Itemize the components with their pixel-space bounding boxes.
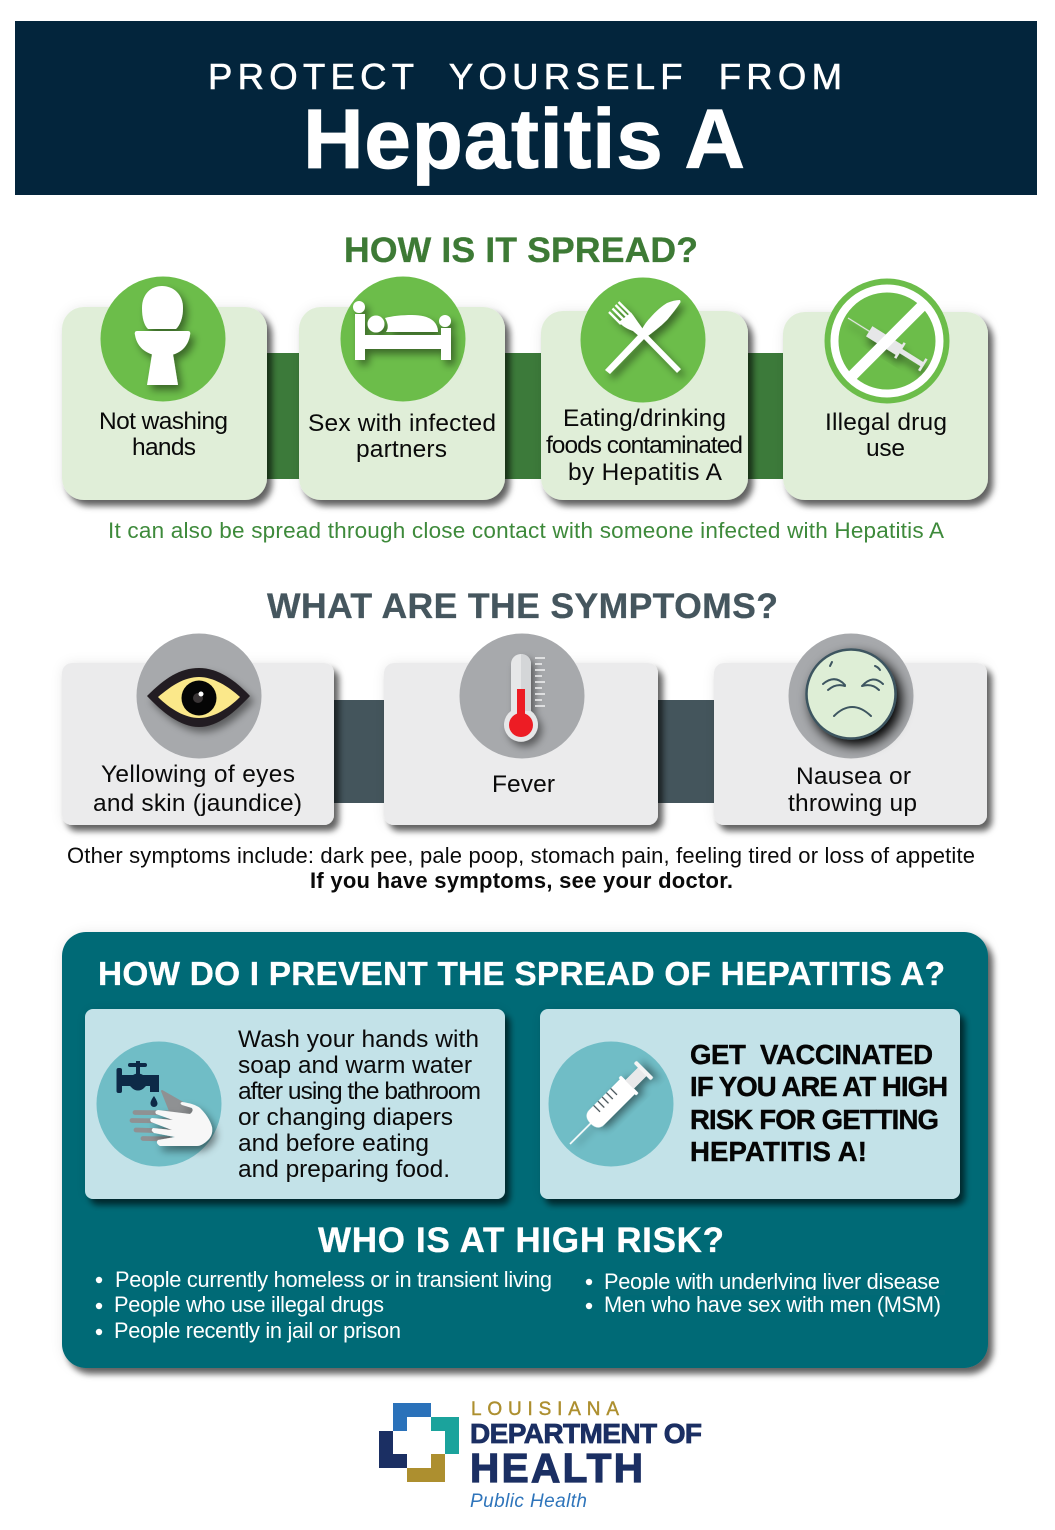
text: handwashing advice — [238, 1026, 481, 1183]
label: not washing hands — [99, 408, 228, 461]
title line: protect yourself from: PROTECT YOURSELF FROM — [208, 56, 842, 97]
icon: syringe — [561, 1060, 654, 1153]
list: risk groups left — [96, 1267, 552, 1343]
panel: prevention and risk — [62, 932, 988, 1368]
label: jaundice — [93, 761, 302, 817]
note: other symptoms — [67, 843, 975, 893]
heading: how do I prevent: HOW DO I PREVENT THE SPREAD OF HEPATITIS A? — [98, 956, 945, 993]
list: risk groups right: Men who have sex with men (MSM) — [604, 1292, 941, 1317]
note: other symptoms: If you have symptoms, see your doctor. — [310, 868, 733, 893]
title: Hepatitis A: Hepatitis A — [303, 92, 745, 186]
text: handwashing advice: and preparing food. — [238, 1156, 450, 1183]
note: close contact: It can also be spread through close contact with someone infected with Hepatitis A — [108, 518, 944, 543]
logo text: DEPARTMENT OF — [470, 1418, 702, 1449]
card: wash your hands — [85, 1009, 505, 1199]
label: nausea: Nausea or — [796, 763, 911, 790]
label: sex with infected partners: Sex with infected — [308, 410, 496, 437]
label: eating or drinking: by Hepatitis A — [568, 459, 723, 486]
text: vaccination message: IF YOU ARE AT HIGH — [690, 1071, 948, 1102]
text: handwashing advice: or changing diapers — [238, 1104, 453, 1131]
text: handwashing advice: and before eating — [238, 1130, 429, 1157]
icon: thermometer — [504, 654, 545, 742]
list: risk groups left: People who use illegal drugs — [114, 1292, 384, 1317]
label: jaundice: and skin (jaundice) — [93, 790, 302, 817]
label: fever: Fever — [492, 771, 555, 798]
card: nausea — [714, 634, 987, 825]
icon: nauseous face — [806, 650, 896, 738]
card: sex with infected partners — [299, 276, 505, 500]
label: illegal drug use — [825, 409, 947, 462]
connector bars — [260, 353, 788, 479]
heading: how is it spread: HOW IS IT SPREAD? — [344, 230, 698, 270]
card: jaundice — [62, 634, 334, 825]
label: not washing hands: Not washing — [99, 408, 228, 435]
logo: Louisiana Department of Health — [379, 1399, 702, 1512]
label: eating or drinking: Eating/drinking — [563, 405, 726, 432]
text: vaccination message: RISK FOR GETTING — [690, 1104, 939, 1135]
list: risk groups right — [586, 1269, 945, 1317]
list: risk groups left: People recently in jail or prison — [114, 1318, 401, 1343]
logo mark: cross — [379, 1403, 459, 1482]
connector bars — [326, 700, 720, 803]
text: vaccination message: GET VACCINATED — [690, 1039, 933, 1070]
icon: fork and knife — [605, 300, 680, 374]
logo text — [470, 1399, 702, 1512]
text: handwashing advice: soap and warm water — [238, 1052, 472, 1079]
section: symptoms — [62, 586, 987, 893]
card: illegal drug use — [783, 278, 988, 500]
icon: faucet and washing hands — [116, 1061, 212, 1146]
text: vaccination message: HEPATITIS A! — [690, 1136, 867, 1167]
list: risk groups left: People currently homeless or in transient living — [115, 1267, 552, 1292]
label: sex with infected partners — [308, 410, 496, 463]
heading: what are the symptoms: WHAT ARE THE SYMPTOMS? — [267, 586, 778, 626]
icon: toilet — [135, 286, 190, 385]
label: illegal drug use: use — [866, 435, 905, 462]
icon: syringe crossed out — [834, 288, 940, 394]
label: nausea — [788, 763, 917, 817]
list: risk groups right: People with underlying liver disease — [604, 1269, 940, 1294]
heading: who is at high risk: WHO IS AT HIGH RISK? — [318, 1221, 724, 1260]
text: handwashing advice: after using the bathroom — [238, 1078, 481, 1105]
label: eating or drinking: foods contaminated — [546, 432, 743, 459]
header banner — [15, 21, 1037, 195]
text: vaccination message — [690, 1039, 948, 1167]
card: not washing hands — [62, 276, 267, 500]
logo text: LOUISIANA — [471, 1399, 619, 1420]
section: how is it spread — [62, 230, 988, 543]
label: illegal drug use: Illegal drug — [825, 409, 947, 436]
label: not washing hands: hands — [132, 434, 196, 461]
icon: bed — [353, 301, 451, 360]
label: nausea: throwing up — [788, 790, 917, 817]
logo text: HEALTH — [470, 1445, 643, 1491]
icon: yellow eye — [147, 668, 250, 727]
label: jaundice: Yellowing of eyes — [101, 761, 295, 788]
note: other symptoms: Other symptoms include: dark pee, pale poop, stomach pain, feeling tired or loss of appetite — [67, 843, 975, 868]
text: handwashing advice: Wash your hands with — [238, 1026, 479, 1053]
card: get vaccinated — [540, 1009, 960, 1199]
card: eating or drinking contaminated foods — [541, 278, 748, 500]
label: sex with infected partners: partners — [356, 436, 447, 463]
card: fever — [384, 634, 658, 825]
logo text: Public Health — [470, 1491, 587, 1512]
label: eating or drinking — [546, 405, 743, 486]
